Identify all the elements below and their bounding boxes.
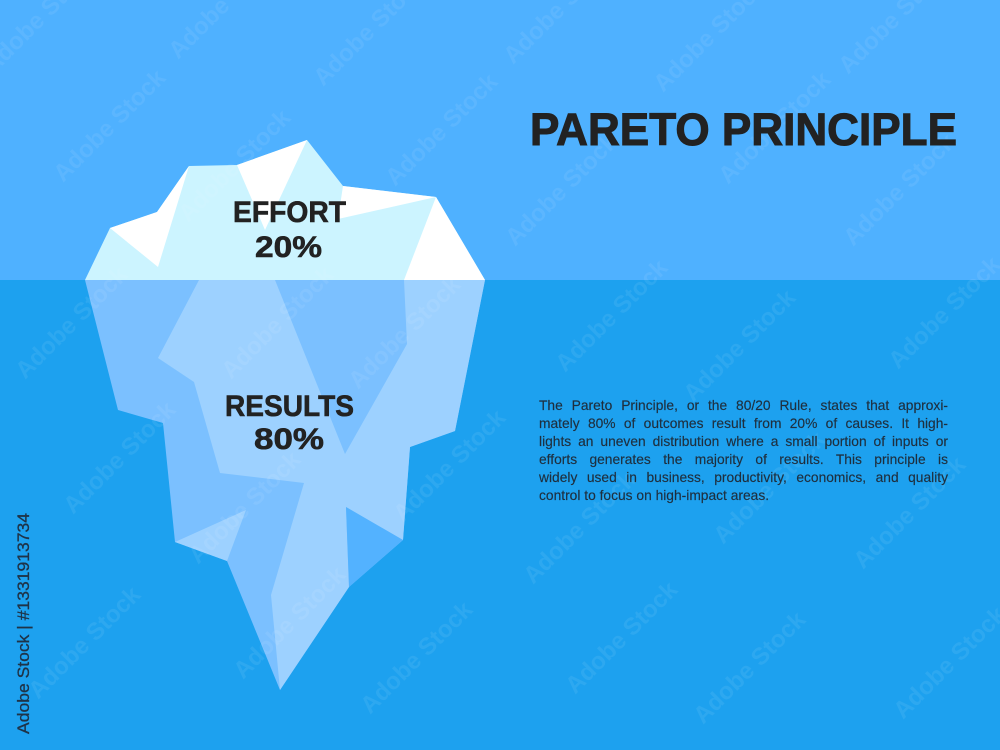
description paragraph: lights an uneven distribution where a small portion of inputs or bbox=[539, 434, 948, 449]
watermarks: Adobe Stock bbox=[183, 446, 307, 569]
description paragraph: control to focus on high-impact areas. bbox=[539, 488, 769, 503]
label: effort 20%: 20% bbox=[255, 231, 322, 264]
stock credit: Adobe Stock | #1331913734 bbox=[14, 513, 33, 734]
label: results 80%: RESULTS bbox=[225, 390, 354, 423]
watermarks: Adobe Stock bbox=[23, 581, 147, 704]
watermarks: Adobe Stock bbox=[500, 128, 624, 251]
watermarks: Adobe Stock bbox=[380, 68, 504, 191]
watermarks: Adobe Stock bbox=[173, 104, 297, 227]
watermarks: Adobe Stock bbox=[216, 261, 340, 384]
watermarks: Adobe Stock bbox=[688, 606, 812, 729]
watermarks: Adobe Stock bbox=[560, 576, 684, 699]
iceberg above water: effort bbox=[85, 140, 485, 280]
watermarks: Adobe Stock bbox=[388, 404, 512, 527]
sky background bbox=[0, 0, 1000, 280]
watermarks: Adobe Stock bbox=[848, 451, 972, 574]
watermarks: Adobe Stock bbox=[838, 128, 962, 251]
description paragraph: widely used in business, productivity, economics, and quality bbox=[539, 470, 948, 485]
description paragraph: The Pareto Principle, or the 80/20 Rule, states that approxi- bbox=[539, 398, 948, 413]
water background bbox=[0, 280, 1000, 750]
watermarks: Adobe Stock bbox=[550, 254, 674, 377]
watermarks: Adobe Stock bbox=[678, 284, 802, 407]
title: PARETO PRINCIPLE bbox=[530, 104, 957, 155]
watermarks: Adobe Stock bbox=[228, 561, 352, 684]
watermarks: Adobe Stock bbox=[48, 64, 172, 187]
watermarks: Adobe Stock bbox=[708, 426, 832, 549]
watermarks: Adobe Stock bbox=[343, 271, 467, 394]
watermarks: Adobe Stock bbox=[713, 66, 837, 189]
watermarks: Adobe Stock bbox=[518, 466, 642, 589]
label: results 80%: 80% bbox=[254, 423, 324, 456]
iceberg below water: results bbox=[85, 280, 485, 690]
label: effort 20%: EFFORT bbox=[233, 196, 346, 229]
description paragraph bbox=[538, 398, 948, 504]
watermarks: Adobe Stock bbox=[58, 396, 182, 519]
description paragraph: mately 80% of outcomes result from 20% of causes. It high- bbox=[539, 416, 948, 431]
description paragraph: efforts generates the majority of results. This principle is bbox=[539, 452, 948, 467]
label: results 80% bbox=[225, 390, 354, 456]
watermarks: Adobe Stock bbox=[355, 596, 479, 719]
label: effort 20% bbox=[233, 196, 346, 264]
watermarks: Adobe Stock bbox=[10, 261, 134, 384]
